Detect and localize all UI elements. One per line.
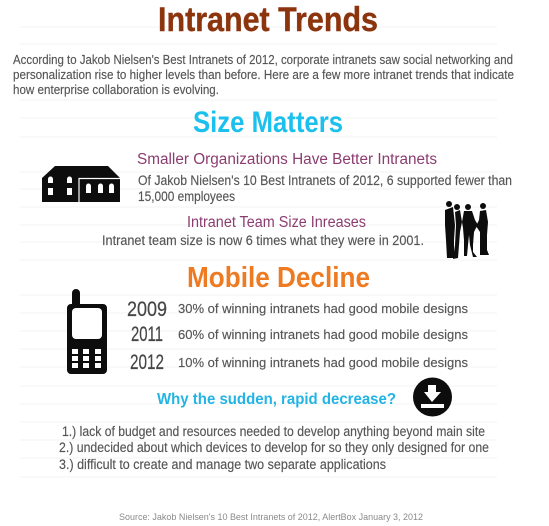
years and mobile design stats: 60% of winning intranets had good mobile designs bbox=[178, 327, 468, 342]
years and mobile design stats: 30% of winning intranets had good mobile designs bbox=[178, 301, 468, 316]
intro text bbox=[13, 52, 514, 97]
icon: people bbox=[445, 201, 489, 259]
reasons list: 2.) undecided about which devices to develop for so they only designed for one bbox=[59, 440, 489, 455]
text: team size: Intranet team size is now 6 times what they were in 2001. bbox=[102, 233, 424, 248]
years and mobile design stats: 2012 bbox=[130, 351, 164, 374]
reasons list bbox=[59, 424, 489, 472]
source: Source: Jakob Nielsen's 10 Best Intranets of 2012, AlertBox January 3, 2012 bbox=[119, 512, 423, 523]
years and mobile design stats: 2011 bbox=[131, 323, 163, 346]
text: smaller organizations: Of Jakob Nielsen's 10 Best Intranets of 2012, 6 supported fewer than bbox=[138, 173, 512, 188]
reasons list: 3.) difficult to create and manage two separate applications bbox=[59, 457, 386, 472]
text: smaller organizations: 15,000 employees bbox=[138, 189, 235, 204]
reasons list: 1.) lack of budget and resources needed to develop anything beyond main site bbox=[62, 424, 485, 439]
intro text: how enterprise collaboration is evolving. bbox=[13, 82, 219, 97]
heading: size matters: Size Matters bbox=[193, 106, 343, 139]
years and mobile design stats: 10% of winning intranets had good mobile designs bbox=[178, 355, 468, 370]
icon: mobile phone bbox=[67, 289, 107, 374]
subheading: smaller organizations: Smaller Organizations Have Better Intranets bbox=[137, 151, 437, 168]
years and mobile design stats: 2009 bbox=[127, 298, 167, 321]
icon: download circle bbox=[413, 378, 452, 416]
text: smaller organizations bbox=[138, 173, 512, 204]
question heading: Why the sudden, rapid decrease? bbox=[157, 391, 396, 408]
title: Intranet Trends bbox=[158, 1, 378, 39]
years and mobile design stats bbox=[127, 298, 468, 374]
heading: mobile decline: Mobile Decline bbox=[187, 262, 370, 294]
icon: building bbox=[42, 166, 120, 202]
subheading: team size: Intranet Team Size Inreases bbox=[187, 214, 366, 231]
